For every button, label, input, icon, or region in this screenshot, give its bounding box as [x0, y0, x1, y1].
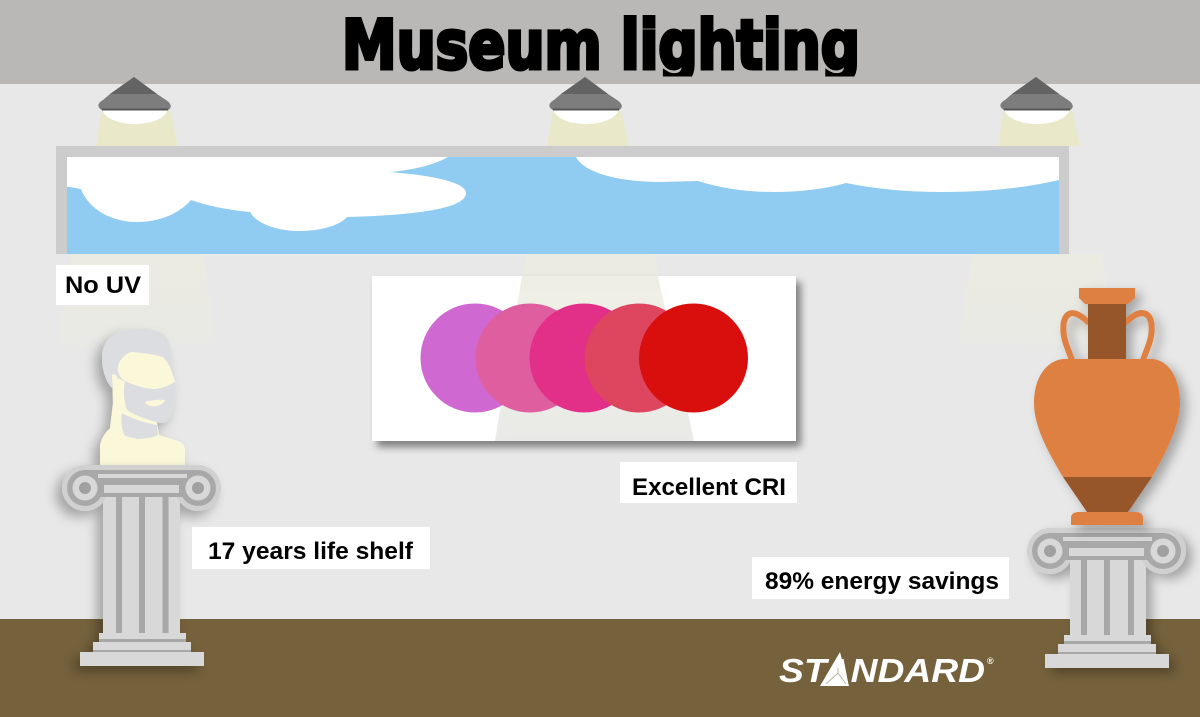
capital	[62, 465, 221, 511]
body	[1034, 359, 1180, 477]
lip	[1079, 288, 1135, 304]
panoramic sky painting	[56, 146, 1069, 254]
base steps	[1045, 635, 1169, 668]
logo: STANDARD: STANDARD	[779, 652, 985, 689]
shaft	[1070, 558, 1146, 638]
clouds right	[576, 157, 1059, 192]
flutes	[1081, 560, 1134, 635]
neck	[1088, 302, 1126, 360]
amphora vase	[1034, 288, 1180, 525]
label: Excellent CRI	[620, 462, 797, 503]
ceiling band	[0, 0, 1200, 84]
face	[118, 352, 175, 389]
foot	[1071, 512, 1143, 525]
capital	[1027, 528, 1186, 574]
bust statue	[100, 329, 185, 466]
left column	[62, 465, 221, 666]
ear	[112, 374, 119, 390]
floor	[0, 619, 1200, 717]
collar	[121, 413, 158, 439]
title: Museum lighting	[342, 6, 860, 86]
logo triangle	[820, 652, 849, 686]
hair	[102, 329, 175, 390]
shaft	[103, 495, 180, 635]
colour circles	[420, 304, 748, 412]
label: 17 years life shelf	[192, 527, 430, 569]
clouds left	[67, 157, 466, 231]
spotlight center	[549, 77, 622, 124]
wall	[0, 84, 1200, 619]
beard	[124, 381, 176, 423]
registered mark: ®	[987, 656, 994, 666]
base steps	[80, 633, 204, 666]
spotlight left	[98, 77, 171, 124]
label: 89% energy savings: 89% energy savings	[765, 568, 999, 595]
light beams above the frame	[96, 109, 1080, 146]
label: No UV: No UV	[65, 272, 141, 299]
spotlight right	[1000, 77, 1073, 124]
label: No UV	[56, 265, 149, 305]
label: 89% energy savings	[752, 557, 1009, 599]
label: Excellent CRI: Excellent CRI	[632, 474, 786, 501]
lower body	[1063, 477, 1152, 512]
handles	[1063, 313, 1152, 360]
mouth	[145, 400, 165, 406]
flutes	[116, 497, 168, 633]
shoulders and neck	[100, 370, 185, 466]
beam across panel	[495, 276, 694, 441]
light beams below the frame	[57, 254, 1118, 350]
label: 17 years life shelf: 17 years life shelf	[208, 538, 414, 565]
colour rendering panel	[372, 276, 796, 441]
right column	[1027, 528, 1186, 668]
